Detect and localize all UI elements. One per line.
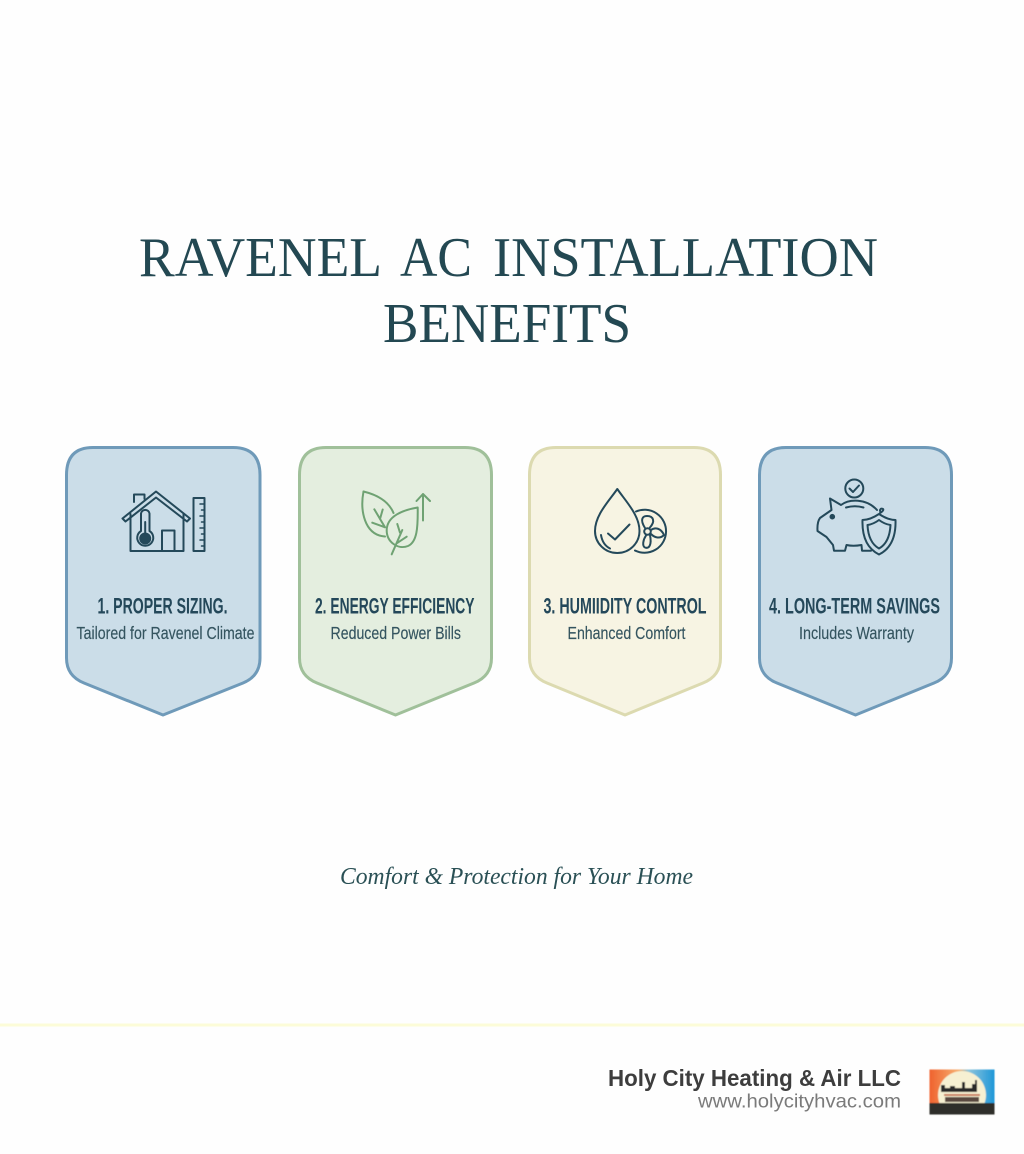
- card shield: [300, 448, 492, 715]
- heading: 3. HUMIIDITY CONTROL: [544, 594, 707, 618]
- subtext: Reduced Power Bills: [330, 623, 461, 643]
- footer divider: [0, 1024, 1024, 1026]
- icon: leaves with up arrow: [362, 492, 430, 554]
- panel: long-term savings: [760, 448, 952, 715]
- title: AC: [400, 227, 472, 289]
- card shield: [530, 448, 720, 715]
- footer company name: Holy City Heating & Air LLC: [608, 1065, 901, 1091]
- title: [139, 227, 878, 355]
- panel: energy efficiency: [300, 448, 492, 715]
- icon: house with thermometer and ruler: [122, 492, 204, 551]
- title: RAVENEL: [139, 227, 382, 289]
- title: BENEFITS: [383, 293, 631, 355]
- tagline: Comfort & Protection for Your Home: [340, 864, 693, 890]
- card shield: [66, 448, 260, 715]
- subtext: Tailored for Ravenel Climate: [76, 623, 254, 643]
- title: INSTALLATION: [493, 227, 878, 289]
- icon: water drop and fan: [595, 489, 666, 553]
- subtext: Includes Warranty: [799, 623, 914, 643]
- heading: 2. ENERGY EFFICIENCY: [315, 594, 474, 618]
- card shield: [760, 448, 952, 715]
- subtext: Enhanced Comfort: [568, 623, 686, 643]
- icon: piggy bank with shield: [817, 480, 896, 554]
- heading: 1. PROPER SIZING.: [98, 594, 228, 618]
- logo: [930, 1070, 994, 1119]
- footer website: www.holycityhvac.com: [697, 1090, 901, 1112]
- panel: humidity control: [530, 448, 720, 715]
- panel: proper sizing: [66, 448, 260, 715]
